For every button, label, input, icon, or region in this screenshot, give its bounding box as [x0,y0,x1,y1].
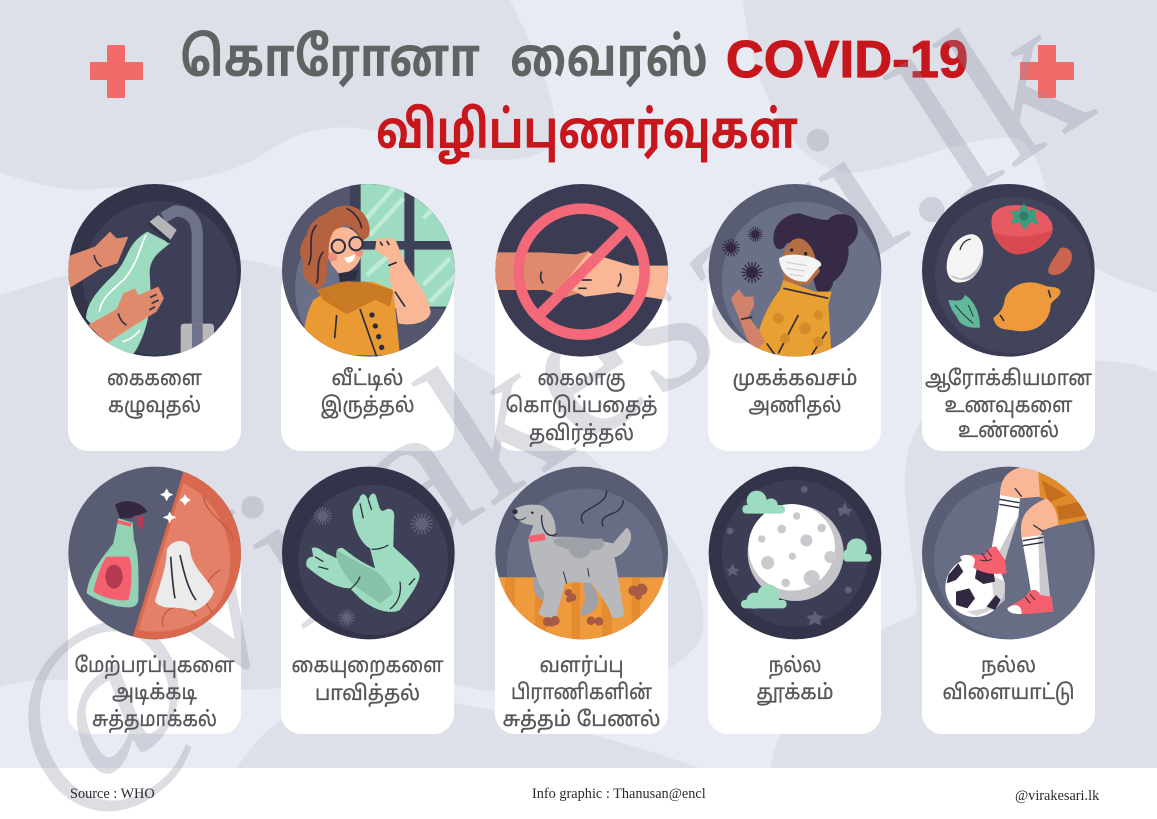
label: healthy food: ஆரோக்கியமான [925,366,1092,392]
card: wash hands [68,270,241,451]
label: avoid handshake: கைலாகு [538,367,626,392]
label: use gloves: பாவித்தல் [315,682,420,707]
label: wash hands: கழுவுதல் [108,394,201,419]
panel: use gloves [282,466,455,707]
icon: woman with mask [708,184,882,357]
label: good exercise [942,654,1074,705]
label: pet hygiene: சுத்தம் பேணல் [502,707,660,733]
label: good exercise: நல்ல [981,654,1036,679]
label: clean surfaces [74,653,235,733]
source credit: Source : WHO [70,786,155,802]
label: good sleep: தூக்கம் [756,681,834,706]
icon: left red cross [91,46,142,97]
label: avoid handshake: கொடுப்பதைத் [506,394,658,419]
panel: clean surfaces [68,466,241,733]
label: wear mask: முகக்கவசம் [732,367,858,391]
label: stay home: வீட்டில் [332,366,404,391]
title word 2: வைரஸ் [510,28,708,88]
card: wear mask [708,270,881,451]
label: healthy food: உண்ணல் [958,419,1059,442]
icon: right red cross [1021,46,1073,97]
label: wash hands [107,367,202,419]
label: use gloves: கையுறைகளை [292,654,444,679]
title word 1: கொரோனா [180,28,480,88]
label: good sleep [756,654,834,706]
social handle: @virakesari.lk [1015,788,1100,804]
icon: hands under tap [68,184,241,357]
card: good exercise [922,553,1095,734]
label: wear mask [732,367,858,419]
title [180,28,968,165]
label: wash hands: கைகளை [107,367,202,390]
graphic credit: Info graphic : Thanusan@encl [532,786,706,802]
label: clean surfaces: மேற்பரப்புகளை [74,653,235,679]
card: stay home [281,270,454,451]
card: avoid handshake [495,270,668,451]
label: healthy food: உணவுகளை [944,394,1073,418]
title line 2: விழிப்புணர்வுகள் [376,102,798,165]
label: wear mask: அணிதல் [748,394,842,419]
card: clean surfaces [68,553,241,734]
panel: wash hands [68,184,241,419]
label: pet hygiene: வளர்ப்பு [540,654,624,678]
label: clean surfaces: சுத்தமாக்கல் [92,708,217,733]
panel: pet hygiene [495,466,668,733]
label: healthy food [925,366,1092,442]
icon: rubber gloves [282,466,455,640]
panel: stay home [282,184,455,419]
footer band [0,768,1157,819]
panel: wear mask [708,184,882,419]
label: stay home [320,366,414,419]
icon: legs and football [922,466,1095,640]
panel: healthy food [922,184,1095,438]
icon: crossed handshake [495,184,668,357]
label: use gloves [292,654,444,707]
title covid: COVID-19 [726,31,968,89]
icon: dog with muddy paws [495,466,668,640]
label: avoid handshake: தவிர்த்தல் [529,422,634,447]
icon: spray bottle and tissue [68,466,241,640]
card: use gloves [281,553,454,734]
label: avoid handshake [506,367,658,447]
card: good sleep [708,553,881,734]
card: pet hygiene [495,553,668,734]
label: good exercise: விளையாட்டு [942,681,1074,705]
card: healthy food [922,270,1095,451]
label: pet hygiene [502,654,660,733]
label: good sleep: நல்ல [768,654,822,679]
icon: woman by window [282,184,455,357]
icon: healthy food items [922,184,1095,357]
label: clean surfaces: அடிக்கடி [112,681,197,705]
panel: avoid handshake [495,184,668,447]
label: stay home: இருத்தல் [320,394,414,419]
panel: good exercise [922,466,1095,706]
icon: moon with clouds and stars [708,466,882,640]
card backgrounds [68,270,1095,734]
panel: good sleep [708,466,882,706]
label: pet hygiene: பிராணிகளின் [511,681,652,704]
